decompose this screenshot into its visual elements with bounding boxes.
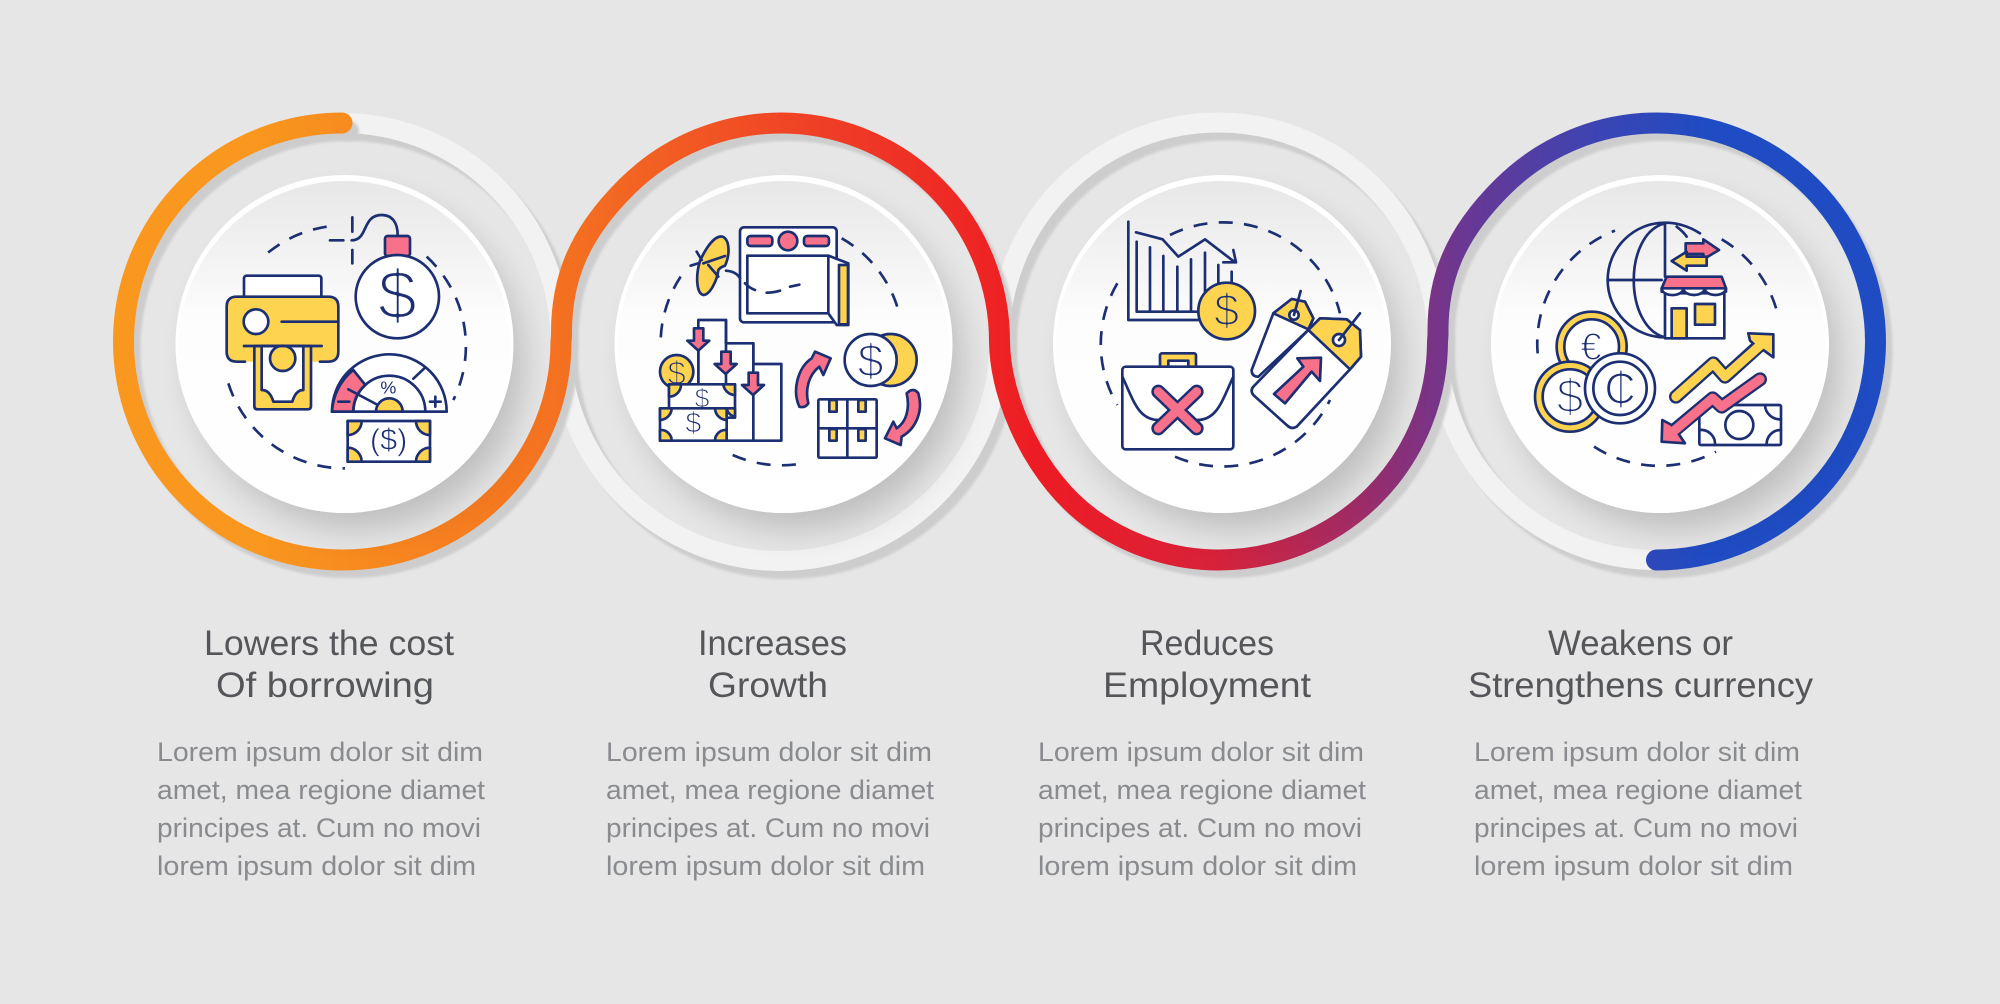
disc 2 xyxy=(614,175,963,530)
heading: Growth xyxy=(708,666,828,705)
coloured ribbon shadow xyxy=(130,131,1882,568)
disc 4 xyxy=(1491,175,1840,530)
body text: lorem ipsum dolor sit dim xyxy=(606,851,925,881)
icon: globe with shop, coins and exchange arrows: $ xyxy=(1557,370,1584,424)
disc 1 xyxy=(176,175,524,530)
heading: Reduces xyxy=(1140,624,1274,663)
body text xyxy=(606,737,935,881)
body text: Lorem ipsum dolor sit dim xyxy=(606,737,932,767)
body text: Lorem ipsum dolor sit dim xyxy=(1474,737,1800,767)
heading xyxy=(1468,624,1814,705)
panel: reduces employment xyxy=(1038,175,1402,881)
body text: principes at. Cum no movi xyxy=(606,813,930,843)
body text: lorem ipsum dolor sit dim xyxy=(1038,851,1357,881)
body text: lorem ipsum dolor sit dim xyxy=(1474,851,1793,881)
body text: amet, mea regione diamet xyxy=(1038,775,1367,805)
heading: Of borrowing xyxy=(216,666,434,705)
body text: amet, mea regione diamet xyxy=(606,775,935,805)
disc 3 xyxy=(1053,175,1402,530)
body text: Lorem ipsum dolor sit dim xyxy=(1038,737,1364,767)
heading xyxy=(698,624,847,705)
heading: Strengthens currency xyxy=(1468,666,1814,705)
heading: Employment xyxy=(1103,666,1311,705)
icon: falling chart, briefcase with cross and price tags: $ xyxy=(1214,284,1239,335)
panel: lowers the cost of borrowing xyxy=(157,175,524,881)
pale ribbon xyxy=(342,122,1656,561)
icon: moth, window, falling bars and cash cycle: $ xyxy=(685,408,701,440)
panel: increases growth xyxy=(606,175,963,881)
body text xyxy=(1038,737,1367,881)
coloured gradient ribbon xyxy=(124,123,1876,560)
icon: printer, bomb, gauge and banknote: ($) xyxy=(370,423,407,457)
body text: Lorem ipsum dolor sit dim xyxy=(157,737,483,767)
panel: weakens or strengthens currency xyxy=(1468,175,1840,881)
heading: Lowers the cost xyxy=(204,624,454,663)
icon: moth, window, falling bars and cash cycle: $ xyxy=(858,335,884,387)
pale ribbon shadow xyxy=(349,130,1664,569)
body text xyxy=(1474,737,1803,881)
body text: principes at. Cum no movi xyxy=(157,813,481,843)
icon: globe with shop, coins and exchange arrows xyxy=(1535,223,1781,466)
icon: printer, bomb, gauge and banknote: % xyxy=(380,377,396,397)
icon: falling chart, briefcase with cross and price tags xyxy=(1101,222,1361,467)
heading xyxy=(1103,624,1311,705)
body text: lorem ipsum dolor sit dim xyxy=(157,851,476,881)
heading xyxy=(204,624,454,705)
icon: printer, bomb, gauge and banknote: $ xyxy=(378,256,417,334)
heading: Weakens or xyxy=(1548,624,1733,663)
icon: moth, window, falling bars and cash cycle: $ xyxy=(695,383,710,413)
icon: printer, bomb, gauge and banknote xyxy=(227,215,466,468)
icon: globe with shop, coins and exchange arrows: ₵ xyxy=(1604,365,1636,413)
body text: amet, mea regione diamet xyxy=(1474,775,1803,805)
body text: principes at. Cum no movi xyxy=(1038,813,1362,843)
heading: Increases xyxy=(698,624,847,663)
body text xyxy=(157,737,486,881)
icon: globe with shop, coins and exchange arrows: € xyxy=(1580,325,1602,368)
icon: moth, window, falling bars and cash cycle: $ xyxy=(667,355,686,392)
body text: principes at. Cum no movi xyxy=(1474,813,1798,843)
body text: amet, mea regione diamet xyxy=(157,775,486,805)
icon: moth, window, falling bars and cash cycle xyxy=(660,227,920,465)
